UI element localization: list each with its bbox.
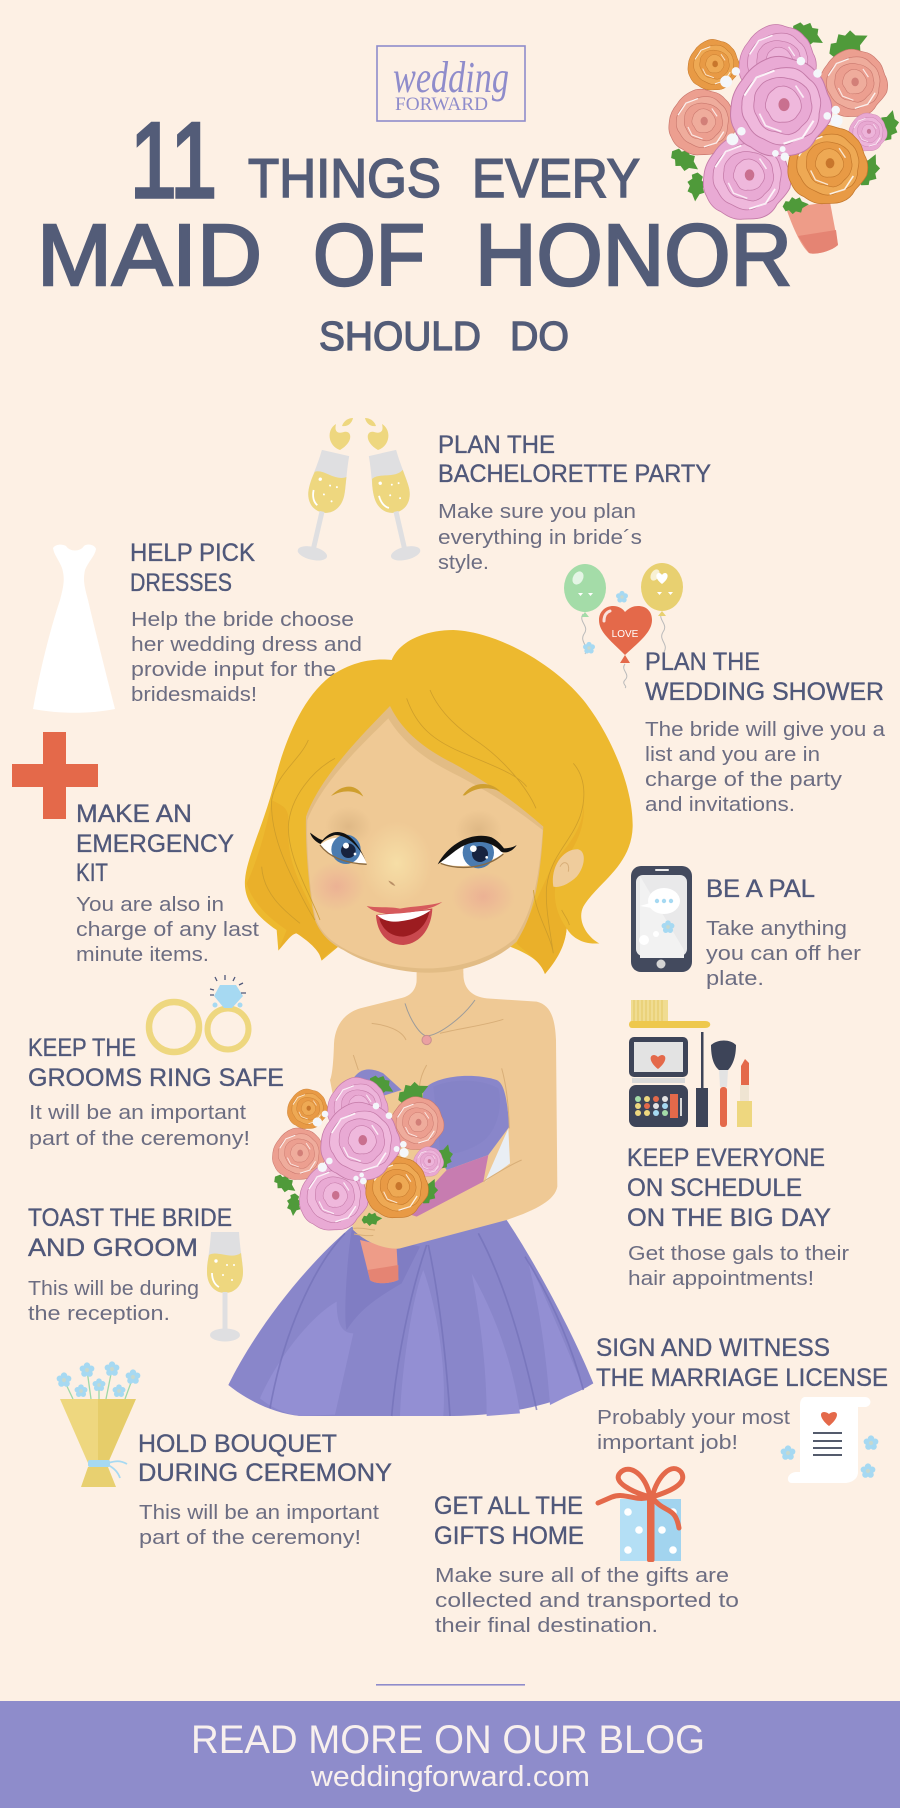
- text block: her wedding dress and: [131, 633, 362, 656]
- icon: makeup set: [629, 1000, 752, 1127]
- heading: AND GROOM: [28, 1234, 198, 1262]
- icon: champagne flute: [207, 1232, 243, 1342]
- heading: [438, 431, 711, 488]
- text block: [628, 1242, 849, 1290]
- heading: HOLD BOUQUET: [138, 1430, 337, 1458]
- heading: GROOMS RING SAFE: [28, 1064, 284, 1092]
- icon: wedding rings: [149, 975, 248, 1052]
- text block: [597, 1406, 790, 1454]
- item: keep everyone on schedule: [627, 1000, 849, 1290]
- text block: Get those gals to their: [628, 1242, 849, 1265]
- heading: EMERGENCY: [76, 830, 234, 858]
- text block: Help the bride choose: [131, 608, 354, 631]
- heading: DRESSES: [130, 569, 232, 597]
- item: plan the bachelorette party: [293, 418, 711, 574]
- heading: [596, 1334, 888, 1392]
- heading: KEEP THE: [28, 1034, 136, 1062]
- title: THINGS: [248, 147, 441, 209]
- heading: GET ALL THE: [434, 1492, 583, 1520]
- eye left: [310, 832, 368, 866]
- neck: [417, 967, 463, 1007]
- icon: champagne glasses: [293, 418, 425, 564]
- title: EVERY: [472, 147, 640, 209]
- heading: [645, 648, 884, 706]
- heading: WEDDING SHOWER: [645, 678, 884, 706]
- text block: their final destination.: [435, 1614, 658, 1637]
- nose: [388, 881, 395, 886]
- title: MAID: [37, 207, 262, 304]
- icon: yellow bouquet: [57, 1361, 140, 1487]
- ear: [553, 849, 584, 887]
- head: [245, 630, 633, 1007]
- title: [37, 100, 792, 359]
- item: help pick dresses: [33, 539, 362, 713]
- text block: part of the ceremony!: [139, 1526, 361, 1549]
- heading: ON THE BIG DAY: [627, 1204, 831, 1232]
- icon: gift box: [598, 1469, 683, 1562]
- heading: [28, 1204, 232, 1262]
- heading: [28, 1034, 284, 1092]
- divider: [376, 1684, 525, 1686]
- text block: This will be during: [28, 1277, 199, 1300]
- text block: provide input for the: [131, 658, 336, 681]
- illustration: maid of honor: [228, 630, 633, 1416]
- heading: THE MARRIAGE LICENSE: [596, 1364, 888, 1392]
- text block: It will be an important: [29, 1101, 246, 1124]
- text block: You are also in: [76, 893, 224, 916]
- eyebrows: [331, 784, 501, 797]
- heading: [130, 539, 255, 597]
- text block: everything in bride´s: [438, 526, 642, 549]
- necklace: [405, 1000, 475, 1045]
- logo: Wedding Forward: [377, 46, 525, 121]
- body and dress: [228, 973, 593, 1416]
- hand: [352, 1213, 420, 1249]
- item: plan the wedding shower: [564, 563, 886, 816]
- item: sign and witness the marriage license: [596, 1334, 888, 1483]
- bodice: [353, 1069, 510, 1217]
- text block: style.: [438, 551, 489, 574]
- text block: plate.: [706, 967, 764, 990]
- logo: Wedding Forward: FORWARD: [395, 94, 488, 115]
- icon: smartphone: [631, 866, 692, 972]
- text block: charge of the party: [645, 768, 843, 791]
- heading: [76, 800, 234, 887]
- item: keep the grooms ring safe: [28, 975, 284, 1150]
- heading: KEEP EVERYONE: [627, 1144, 825, 1172]
- text block: [29, 1101, 250, 1150]
- text block: [435, 1564, 739, 1637]
- heading: BE A PAL: [706, 875, 815, 903]
- text block: bridesmaids!: [131, 683, 257, 706]
- icon: balloons: [564, 563, 683, 688]
- text block: minute items.: [76, 943, 209, 966]
- eye right: [438, 836, 517, 868]
- text block: The bride will give you a: [645, 718, 886, 741]
- heading: DURING CEREMONY: [138, 1459, 392, 1487]
- title: DO: [510, 313, 569, 359]
- title: SHOULD: [319, 313, 481, 359]
- icon: white dress: [33, 545, 115, 713]
- mouth: [367, 902, 442, 945]
- text block: you can off her: [706, 942, 861, 965]
- heading: [434, 1492, 584, 1550]
- icon: balloons: LOVE: [612, 629, 639, 640]
- heading: KIT: [76, 859, 108, 887]
- call to action: READ MORE ON OUR BLOG: [191, 1718, 705, 1762]
- text block: charge of any last: [76, 918, 259, 941]
- text block: [28, 1277, 199, 1325]
- text block: [706, 917, 861, 990]
- heading: MAKE AN: [76, 800, 192, 828]
- text block: [139, 1501, 379, 1549]
- heading: SIGN AND WITNESS: [596, 1334, 830, 1362]
- heading: BACHELORETTE PARTY: [438, 460, 711, 488]
- logo: Wedding Forward: wedding: [393, 53, 509, 102]
- title: 11: [130, 100, 217, 220]
- text block: the reception.: [28, 1302, 170, 1325]
- skirt: [228, 1220, 593, 1416]
- icon: scroll: [781, 1397, 878, 1483]
- text block: important job!: [597, 1431, 738, 1454]
- item: hold bouquet during ceremony: [57, 1361, 392, 1549]
- heading: PLAN THE: [645, 648, 760, 676]
- text block: Make sure you plan: [438, 500, 636, 523]
- bouquet: top right: [666, 16, 900, 254]
- item: be a pal: [631, 866, 861, 990]
- item: make an emergency kit: [12, 732, 259, 966]
- heading: GIFTS HOME: [434, 1522, 584, 1550]
- bouquet handle: [360, 1240, 398, 1283]
- heading: TOAST THE BRIDE: [28, 1204, 232, 1232]
- heading: [627, 1144, 831, 1232]
- neck, shoulders and arm: [330, 973, 557, 1249]
- hair strands: [262, 690, 584, 953]
- website: weddingforward.com: [310, 1761, 590, 1793]
- bouquet: [270, 1071, 456, 1232]
- text block: Make sure all of the gifts are: [435, 1564, 729, 1587]
- heading: [138, 1430, 392, 1487]
- icon: red cross: [12, 732, 98, 819]
- title: OF: [313, 207, 425, 304]
- text block: This will be an important: [139, 1501, 379, 1524]
- title: HONOR: [475, 207, 792, 304]
- item: get all the gifts home: [434, 1469, 739, 1637]
- text block: list and you are in: [645, 743, 820, 766]
- footer banner: [0, 1701, 900, 1808]
- face: [306, 706, 543, 973]
- text block: and invitations.: [645, 793, 795, 816]
- heading: PLAN THE: [438, 431, 555, 459]
- heading: ON SCHEDULE: [627, 1174, 802, 1202]
- text block: Probably your most: [597, 1406, 790, 1429]
- text block: [438, 500, 642, 574]
- hair: [245, 630, 633, 974]
- item: toast the bride and groom: [28, 1204, 243, 1342]
- text block: Take anything: [706, 917, 847, 940]
- text block: [645, 718, 886, 816]
- heading: HELP PICK: [130, 539, 255, 567]
- text block: [76, 893, 259, 966]
- text block: part of the ceremony!: [29, 1127, 250, 1150]
- text block: hair appointments!: [628, 1267, 814, 1290]
- text block: collected and transported to: [435, 1589, 739, 1612]
- text block: [131, 608, 362, 706]
